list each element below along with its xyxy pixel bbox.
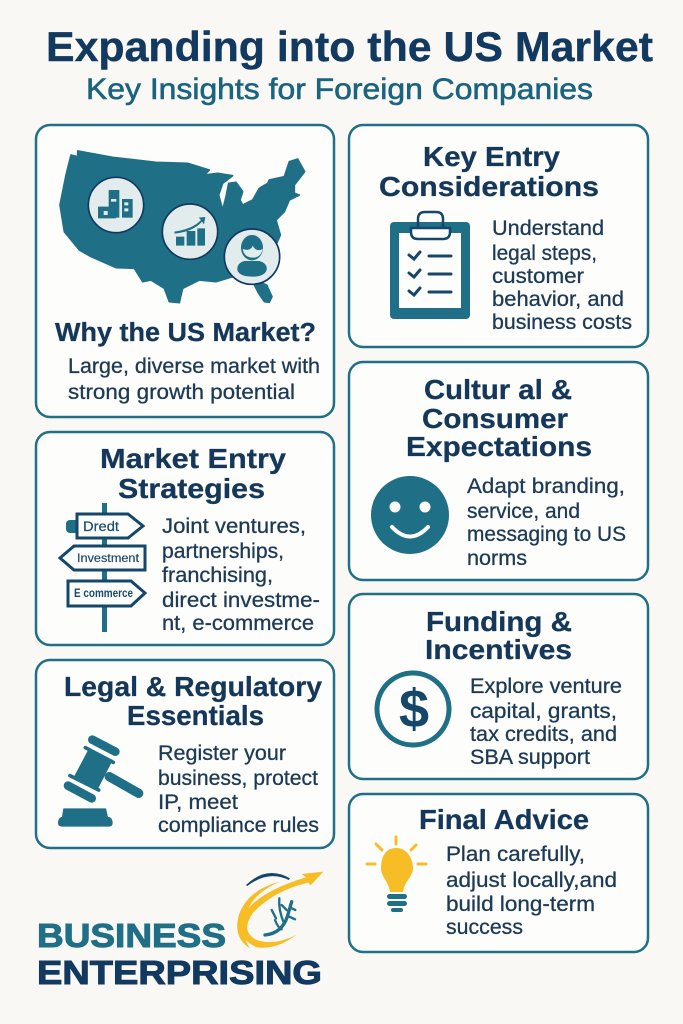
panel: key entry considerations <box>349 125 648 347</box>
text block: compliance rules <box>158 813 319 837</box>
logo wordmark <box>37 917 322 991</box>
heading: Final Advice <box>419 804 589 835</box>
panel: funding and incentives <box>349 594 648 779</box>
title: Expanding into the US Market <box>46 23 653 70</box>
heading: Funding & <box>426 606 572 637</box>
heading <box>379 141 599 202</box>
icon: clipboard <box>390 212 470 319</box>
text block: partnerships, <box>162 539 284 563</box>
text block: Explore venture <box>470 674 622 698</box>
heading: Considerations <box>379 171 599 202</box>
panel: why the US market <box>36 125 334 417</box>
heading <box>406 374 592 462</box>
subtitle: Key Insights for Foreign Companies <box>86 73 593 106</box>
text block: Register your <box>158 741 286 765</box>
text block: tax credits, and <box>470 722 617 746</box>
heading: Why the US Market? <box>55 319 316 347</box>
text block: legal steps, <box>492 241 597 265</box>
text block: Joint ventures, <box>162 514 306 538</box>
icon: gavel <box>58 740 139 827</box>
text block: build long-term <box>446 892 595 916</box>
icon: US map with circles <box>60 151 305 303</box>
heading: Essentials <box>127 700 264 731</box>
logo emblem <box>237 872 323 948</box>
heading <box>64 671 322 731</box>
text block: Plan carefully, <box>446 842 585 866</box>
logo <box>37 872 323 991</box>
heading <box>425 606 572 665</box>
text block: Adapt branding, <box>467 474 625 498</box>
heading: Legal & Regulatory <box>64 671 322 702</box>
icon: signpost: E commerce <box>74 588 133 600</box>
text block: business, protect <box>158 766 318 790</box>
heading: Expectations <box>406 431 592 462</box>
text block: direct investme- <box>162 588 320 612</box>
text block: behavior, and <box>492 287 624 311</box>
text block: business costs <box>492 310 632 334</box>
text block: IP, meet <box>158 790 238 814</box>
heading: Strategies <box>118 473 265 504</box>
text block: capital, grants, <box>470 699 617 723</box>
heading: Market Entry <box>100 443 286 474</box>
heading: Key Entry <box>423 141 560 172</box>
icon: signpost: Dredt <box>83 519 119 534</box>
icon: dollar <box>377 673 449 745</box>
heading <box>100 443 286 504</box>
text block: Understand <box>492 216 604 240</box>
icon: smiley <box>371 476 449 554</box>
text block: messaging to US <box>467 522 626 546</box>
logo wordmark: BUSINESS <box>37 917 226 954</box>
text block: strong growth potential <box>68 380 295 404</box>
heading: Cultur al & <box>424 374 572 405</box>
icon: signpost <box>60 503 145 632</box>
text block: success <box>446 915 523 939</box>
panel: market entry strategies <box>36 432 334 645</box>
text block: norms <box>467 546 527 570</box>
heading: Incentives <box>425 634 572 665</box>
text block: franchising, <box>162 563 273 587</box>
icon: dollar: $ <box>399 679 429 739</box>
text block: customer <box>492 264 584 288</box>
panel: final advice <box>349 794 648 952</box>
text block: nt, e-commerce <box>162 611 314 635</box>
logo wordmark: ENTERPRISING <box>37 954 322 991</box>
text block <box>467 474 626 570</box>
text block: adjust locally,and <box>446 868 617 892</box>
text block: SBA support <box>470 745 590 769</box>
panel: cultural and consumer expectations <box>349 362 648 580</box>
text block <box>492 216 632 334</box>
text block: service, and <box>467 499 580 523</box>
heading: Consumer <box>422 403 568 434</box>
icon: light bulb <box>367 837 426 912</box>
text block: Large, diverse market with <box>68 354 320 378</box>
panel: legal and regulatory essentials <box>36 660 334 848</box>
icon: signpost: Investment <box>77 551 140 565</box>
text block <box>162 514 320 635</box>
text block <box>446 842 617 939</box>
text block <box>68 354 320 404</box>
text block <box>470 674 622 769</box>
text block <box>158 741 319 837</box>
